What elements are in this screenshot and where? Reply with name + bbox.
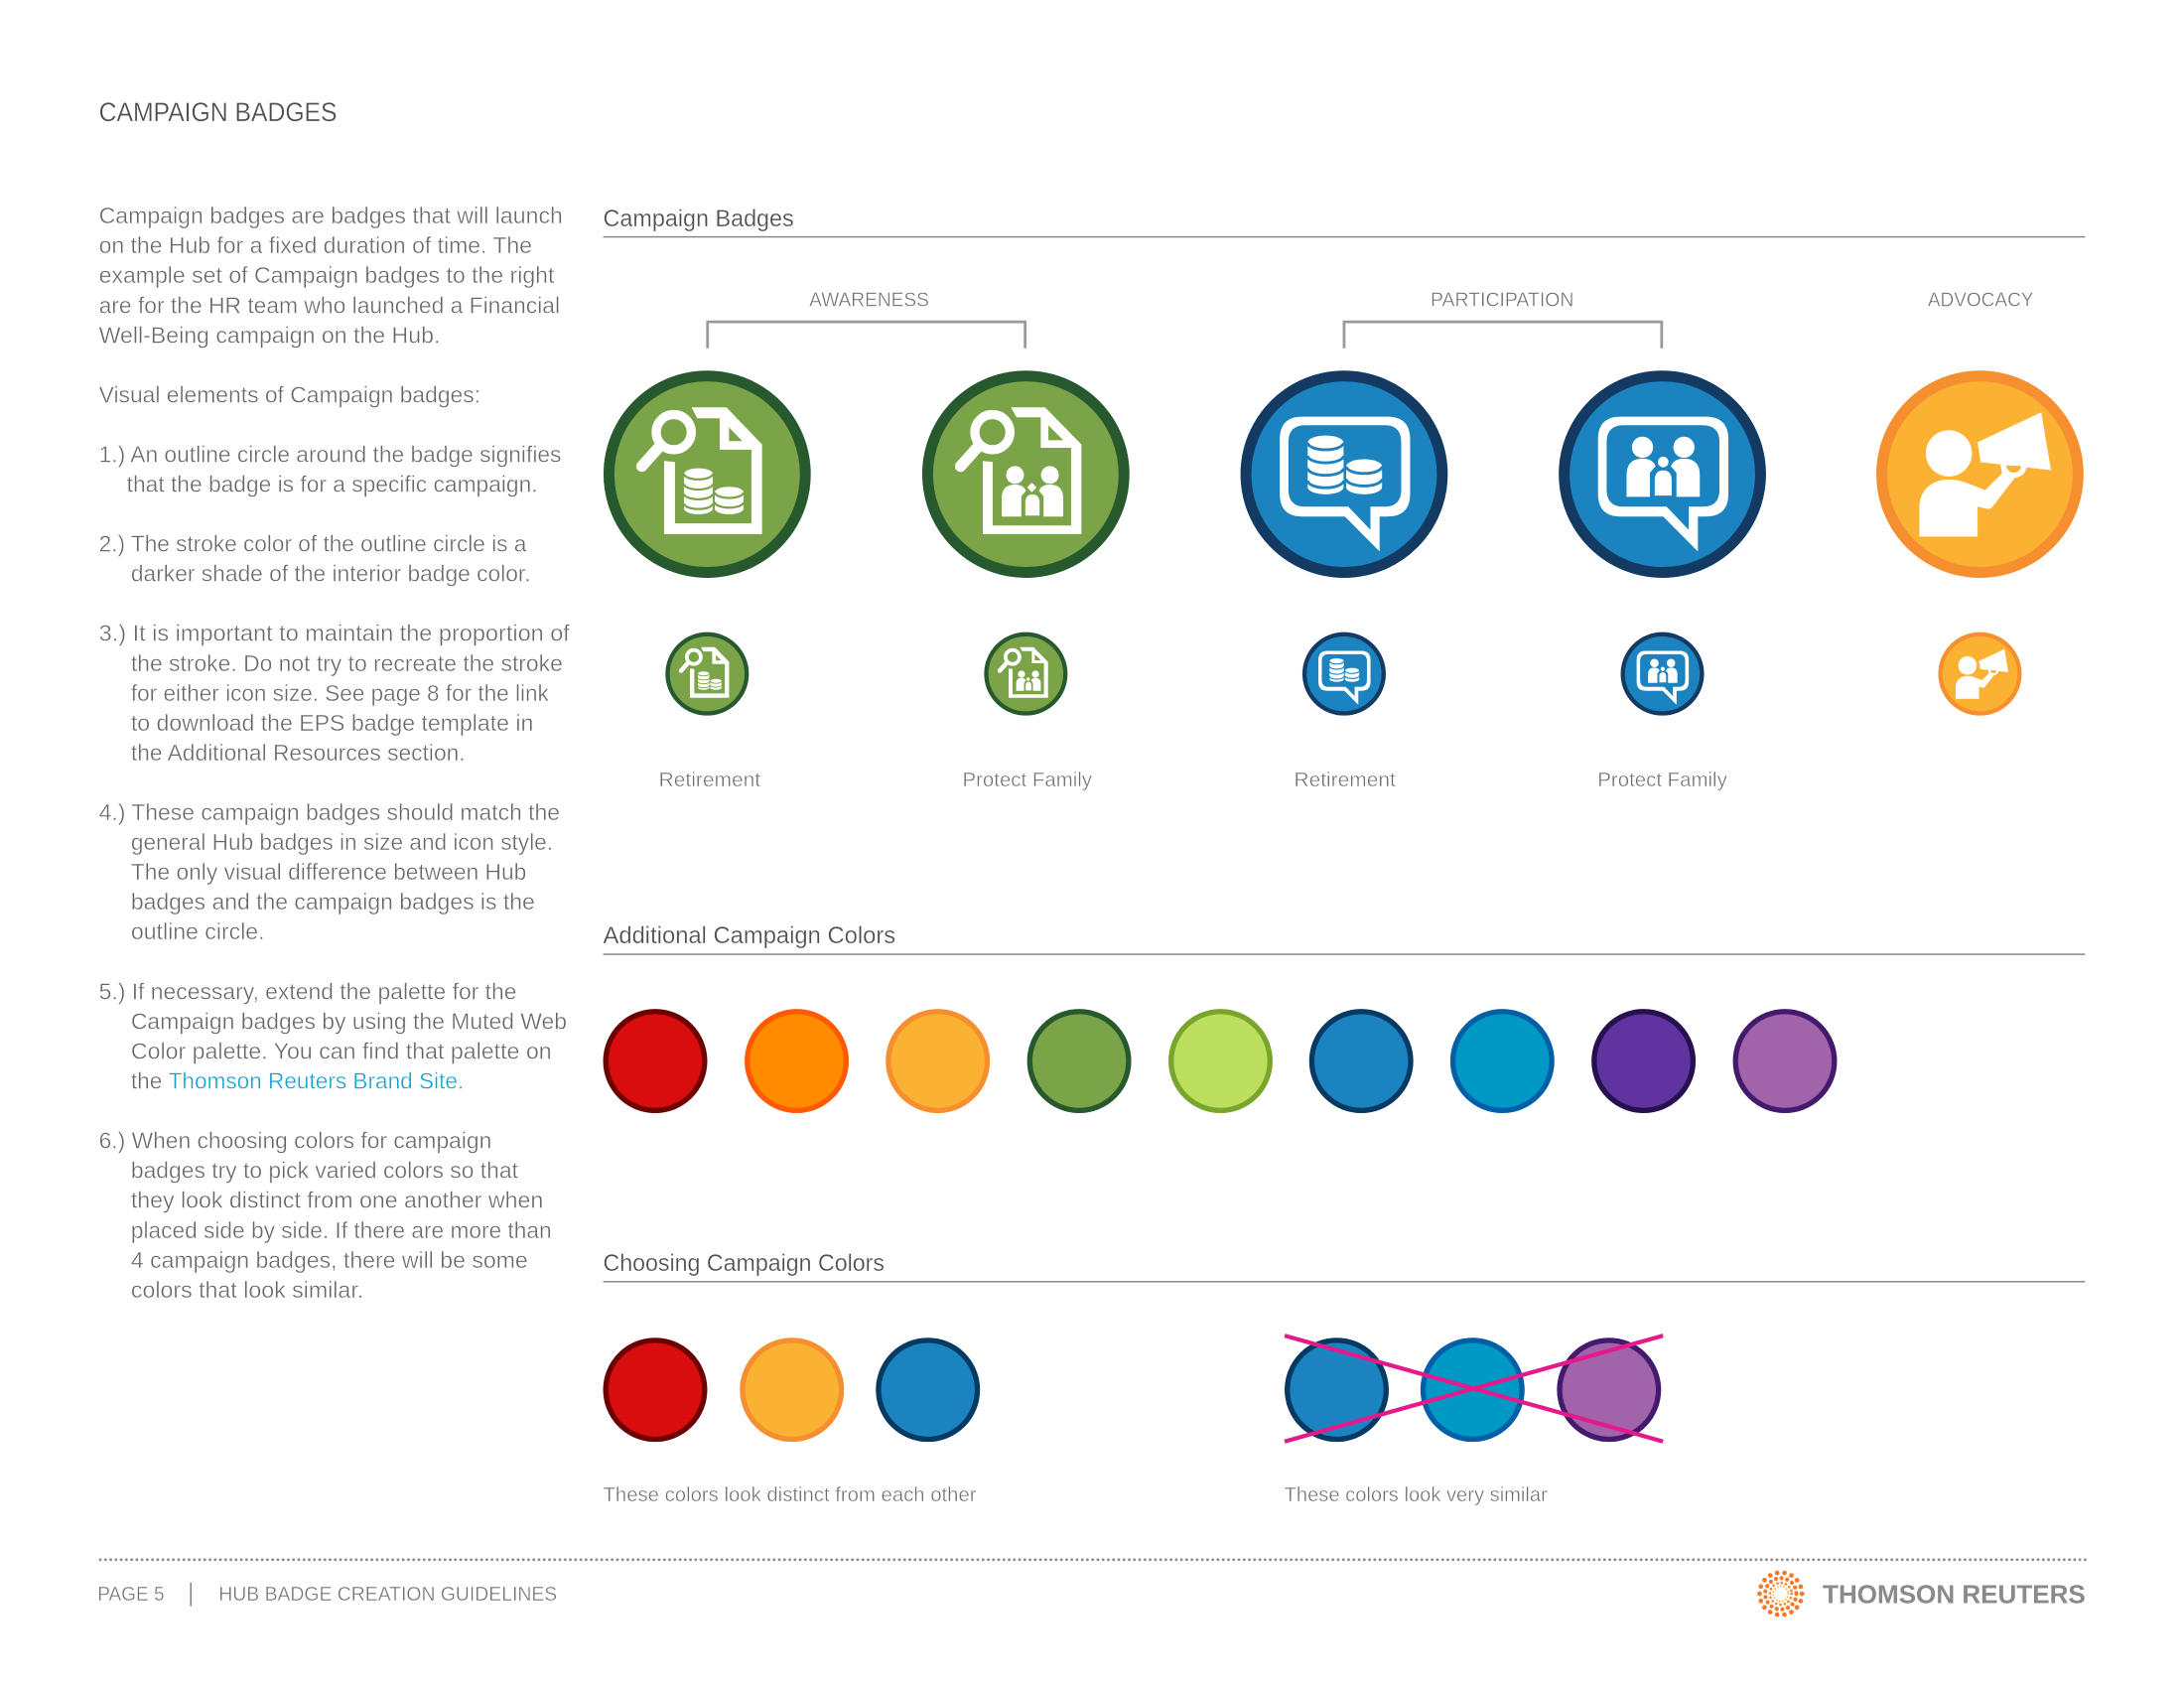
list item 3 xyxy=(99,621,570,766)
list item 3: the Additional Resources section. xyxy=(131,740,466,766)
list item 6: badges try to pick varied colors so that xyxy=(131,1158,519,1184)
color swatch: green xyxy=(1029,1012,1129,1110)
heading: choosing campaign colors: Choosing Campaign Colors xyxy=(604,1250,885,1277)
list item 6: 4 campaign badges, there will be some xyxy=(131,1247,528,1273)
caption: protect family, participation: Protect Family xyxy=(1597,770,1728,791)
color swatch: violet xyxy=(1735,1012,1835,1110)
list item 4 xyxy=(99,799,560,944)
caption: retirement, awareness: Retirement xyxy=(659,770,760,791)
heading: additional campaign colors: Additional Campaign Colors xyxy=(604,922,895,949)
caption: distinct colors: These colors look distinct from each other xyxy=(604,1484,977,1506)
badge: participation retirement, large xyxy=(1246,376,1442,573)
panel: campaign badges xyxy=(604,206,2085,791)
list item 6: colors that look similar. xyxy=(131,1277,363,1303)
list item 3: 3.) It is important to maintain the proportion of xyxy=(99,621,570,646)
intro paragraph: on the Hub for a fixed duration of time. The xyxy=(99,232,532,258)
bad example: similar colors crossed out xyxy=(1285,1336,1663,1442)
title: CAMPAIGN BADGES xyxy=(99,97,338,127)
color swatch: teal xyxy=(1453,1012,1552,1110)
list item 6: 6.) When choosing colors for campaign xyxy=(99,1128,491,1154)
caption: retirement, participation: Retirement xyxy=(1294,770,1396,791)
list item 3: to download the EPS badge template in xyxy=(131,710,533,736)
badge: advocacy megaphone, small xyxy=(1941,634,2019,714)
caption: protect family, awareness: Protect Family xyxy=(963,770,1093,791)
label and bracket: awareness xyxy=(708,290,1025,349)
color swatch: lime xyxy=(1171,1012,1270,1110)
list item 4: outline circle. xyxy=(131,918,265,944)
list item 2: 2.) The stroke color of the outline circle is a xyxy=(99,531,526,557)
footer xyxy=(97,1560,2088,1615)
icon: thomson reuters logo mark xyxy=(1759,1573,1802,1615)
badge: awareness retirement, small xyxy=(667,634,747,714)
list item 4: 4.) These campaign badges should match the xyxy=(99,799,560,825)
list item 2: darker shade of the interior badge color. xyxy=(131,561,531,587)
intro paragraph: Campaign badges are badges that will launch xyxy=(99,203,563,228)
list item 1 xyxy=(99,441,561,497)
label and bracket: participation: PARTICIPATION xyxy=(1431,290,1573,312)
intro paragraph xyxy=(99,203,563,348)
list item 1: 1.) An outline circle around the badge signifies xyxy=(99,441,561,467)
label: advocacy: ADVOCACY xyxy=(1928,290,2034,312)
list item 4: general Hub badges in size and icon style. xyxy=(131,829,553,855)
label and bracket: participation xyxy=(1344,290,1662,349)
list item 6 xyxy=(99,1128,552,1303)
badge: awareness protect family, large xyxy=(927,376,1124,573)
color swatch: blue xyxy=(1311,1012,1411,1110)
list item 5: Campaign badges by using the Muted Web xyxy=(131,1008,567,1034)
good example: distinct colors xyxy=(606,1340,978,1439)
list item 6: placed side by side. If there are more than xyxy=(131,1217,552,1243)
intro paragraph: Well-Being campaign on the Hub. xyxy=(99,322,440,348)
badge: participation protect family, small xyxy=(1623,634,1702,714)
list item 4: badges and the campaign badges is the xyxy=(131,889,535,914)
list item 1: that the badge is for a specific campaign. xyxy=(127,472,538,497)
color swatch: amber xyxy=(888,1012,987,1110)
color swatch: purple xyxy=(1594,1012,1693,1110)
intro paragraph: example set of Campaign badges to the right xyxy=(99,262,555,288)
badge: awareness protect family, small xyxy=(987,634,1065,714)
list item 5: 5.) If necessary, extend the palette for the xyxy=(99,978,517,1004)
list item 2 xyxy=(99,531,531,587)
color swatch: red xyxy=(606,1012,705,1110)
subheading: visual elements: Visual elements of Campaign badges: xyxy=(99,381,480,407)
color swatch: orange xyxy=(748,1012,846,1110)
footer: page number: PAGE 5 xyxy=(97,1584,165,1606)
panel: left explanatory text column xyxy=(99,203,570,1303)
badge: awareness retirement, large xyxy=(609,376,805,573)
panel: choosing campaign colors xyxy=(604,1250,2085,1506)
intro paragraph: are for the HR team who launched a Financial xyxy=(99,292,560,318)
logo wordmark: THOMSON REUTERS xyxy=(1823,1579,2086,1609)
footer: document title: HUB BADGE CREATION GUIDELINES xyxy=(218,1584,557,1606)
heading: campaign badges: Campaign Badges xyxy=(604,206,794,232)
caption: similar colors: These colors look very similar xyxy=(1285,1484,1548,1506)
list item 3: the stroke. Do not try to recreate the stroke xyxy=(131,650,563,676)
label and bracket: awareness: AWARENESS xyxy=(809,290,929,312)
list item 3: for either icon size. See page 8 for the link xyxy=(131,680,549,706)
list item 6: they look distinct from one another when xyxy=(131,1188,543,1213)
badge: participation protect family, large xyxy=(1565,376,1760,573)
badge: participation retirement, small xyxy=(1304,634,1384,714)
list item 5: Color palette. You can find that palette on xyxy=(131,1038,552,1063)
badge: advocacy megaphone, large xyxy=(1882,376,2078,573)
panel: additional campaign colors xyxy=(604,922,2085,1110)
list item 4: The only visual difference between Hub xyxy=(131,859,526,885)
list item 5 xyxy=(99,978,567,1093)
list item 5: the Thomson Reuters Brand Site. xyxy=(131,1067,464,1093)
